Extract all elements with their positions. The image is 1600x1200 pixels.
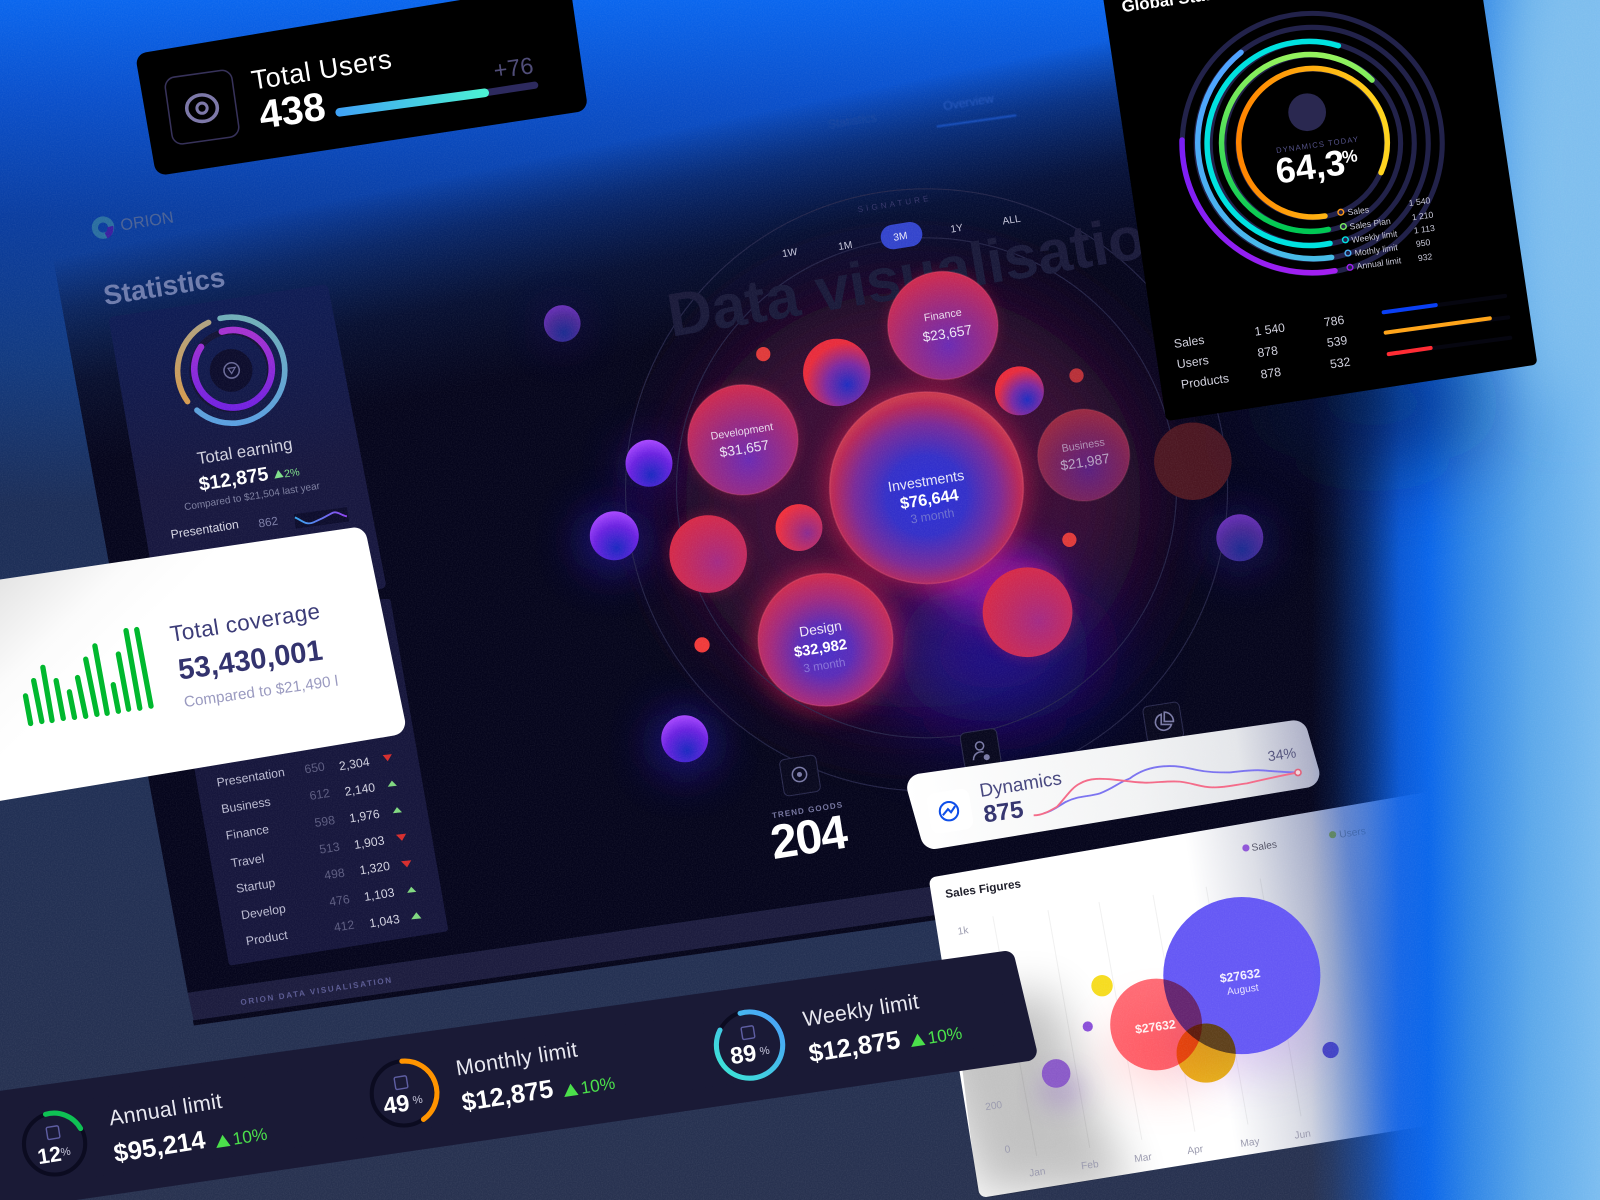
footer label: ORION DATA VISUALISATION: [240, 975, 393, 1007]
period selector: SIGNATURE: [857, 194, 932, 214]
axis labels: 0: [1004, 1144, 1011, 1156]
table rows: Travel: [230, 851, 265, 870]
gauge: 12%: 12: [36, 1142, 63, 1169]
ring legend: Mothly limit: [1354, 242, 1399, 258]
bubble: red lower right: [983, 567, 1072, 657]
period selector: [781, 194, 1022, 260]
gauge: 49%: %: [412, 1094, 424, 1107]
table rows: 498: [323, 866, 346, 883]
bubble: design: 3 month: [803, 656, 846, 675]
icon: eye: [164, 69, 240, 145]
chart legend: Users: [1339, 826, 1367, 841]
bubble: red left: [669, 515, 747, 593]
icon: user star: [960, 728, 1002, 770]
icon: pie chart: [1142, 701, 1184, 743]
period selector: 1M: [838, 240, 853, 253]
bubble: investments: [830, 392, 1023, 584]
card: total users: [148, 0, 576, 163]
bubble: red centre small: [776, 504, 822, 551]
card: global statistics: [1104, 0, 1532, 415]
bubble: finance: Finance: [923, 307, 963, 324]
dynamics today: DYNAMICS TODAY: [1276, 134, 1360, 155]
ring tracks: [1182, 13, 1442, 273]
weekly limit: [716, 989, 963, 1078]
bubble: design: Design: [798, 618, 843, 640]
panel: limits: [0, 961, 1027, 1190]
table rows: Product: [245, 928, 289, 948]
bubble chart: August: [1226, 983, 1260, 998]
gauge: 12%: [24, 1113, 85, 1174]
period selector: 1W: [781, 247, 799, 260]
table rows: Presentation: [216, 765, 286, 790]
table rows: 412: [333, 918, 356, 935]
card: total users: Total Users: [249, 44, 394, 96]
ring centre dot: [1288, 93, 1326, 131]
stats table: 1 540: [1254, 321, 1286, 339]
total earning: [183, 434, 321, 513]
stats table: 539: [1326, 333, 1348, 350]
trend goods: 204: [767, 806, 851, 870]
sales title: Sales Figures: [945, 877, 1022, 901]
bubble: finance: $23,657: [922, 322, 973, 345]
weekly limit: Weekly limit: [801, 989, 921, 1031]
dynamics today: 64,3: [1273, 142, 1347, 192]
table rows: Finance: [225, 822, 270, 843]
bubble: business: $21,987: [1059, 451, 1111, 473]
bubble: red blue upper left: [803, 339, 870, 406]
monthly limit: Monthly limit: [454, 1038, 579, 1080]
annual limit: 10%: [231, 1124, 269, 1149]
stats table: 786: [1323, 313, 1345, 330]
dark haze under global panel: [1265, 342, 1480, 464]
axis labels: Jun: [1294, 1129, 1312, 1142]
table rows: 2,140: [344, 780, 376, 799]
dynamics today: %: [1341, 145, 1359, 167]
logo: [95, 208, 175, 236]
axis labels: Apr: [1187, 1144, 1204, 1157]
table rows: Develop: [240, 901, 287, 922]
table rows: 2,304: [338, 755, 371, 773]
bubble glow: [546, 268, 1268, 773]
period selector: 1Y: [950, 223, 964, 236]
annual limit: $95,214: [112, 1126, 208, 1168]
header tabs: Statistics: [827, 110, 877, 132]
presentation row: Presentation: [170, 517, 240, 542]
presentation row: [170, 507, 349, 542]
line chart: [1034, 766, 1301, 815]
total earning: Total earning: [196, 434, 294, 468]
card: total coverage: [0, 541, 392, 791]
table rows: 1,976: [348, 807, 381, 825]
stats table: 878: [1257, 343, 1279, 360]
table rows: 612: [308, 786, 331, 803]
bubble: investments: 3 month: [910, 506, 956, 526]
orbit rings: [626, 189, 1228, 791]
bubble chart: $27632: [1219, 966, 1261, 986]
table rows: 513: [318, 840, 341, 857]
card: total coverage: 53,430,001: [176, 635, 325, 687]
bubble: development: [688, 385, 798, 495]
table rows: Startup: [235, 876, 276, 896]
period selector: ALL: [1002, 214, 1022, 227]
stats table: Products: [1180, 371, 1230, 392]
bubble: finance: [888, 271, 998, 380]
ring legend: Sales: [1347, 204, 1370, 217]
card: total coverage: Compared to $21,490 l: [183, 673, 339, 711]
dashboard footer bar: [188, 824, 1372, 1021]
purple spheres: [544, 305, 1263, 762]
axis labels: Jan: [1028, 1166, 1046, 1180]
ring legend: 1 113: [1413, 223, 1436, 236]
stats table: Sales: [1173, 333, 1205, 351]
stats table: 878: [1260, 365, 1282, 382]
total earning: Compared to $21,504 last year: [183, 481, 321, 513]
card: total coverage: Total coverage: [168, 598, 322, 647]
gauge: 89%: [716, 1011, 783, 1078]
bubble: business: Business: [1061, 436, 1106, 455]
donut chart: [178, 317, 285, 423]
axis labels: Feb: [1081, 1159, 1100, 1172]
table rows: 1,903: [353, 833, 386, 852]
trend goods: [767, 754, 851, 870]
bubble: investments: Investments: [887, 468, 965, 496]
gauge: 89%: 89: [728, 1039, 758, 1069]
heading: statistics: Statistics: [101, 261, 227, 311]
logo: ORION: [119, 208, 175, 235]
table rows: 598: [314, 813, 336, 830]
annual limit: Annual limit: [107, 1089, 224, 1130]
card: dynamics: 875: [982, 796, 1025, 828]
card: dynamics: Dynamics: [978, 767, 1063, 801]
panel: statistics card: [114, 290, 445, 962]
ring arcs: [1182, 41, 1387, 273]
right blue glow: [1311, 0, 1600, 1200]
bubble: red blue upper right: [995, 366, 1044, 415]
monthly limit: 10%: [579, 1073, 617, 1098]
axis labels: [957, 925, 1312, 1180]
ring legend: 950: [1415, 237, 1431, 249]
bubble chart: $27632: [1134, 1017, 1177, 1037]
ring legend: Weekly limit: [1351, 228, 1398, 245]
bubble: dim red: [1154, 422, 1232, 500]
gauge: 12%: %: [60, 1146, 72, 1159]
table rows: Business: [220, 795, 272, 816]
bubble: design: [758, 573, 893, 706]
trend goods: TREND GOODS: [771, 800, 844, 820]
card: total users: +76: [492, 52, 535, 84]
stats table: Users: [1176, 353, 1210, 371]
chart legend: Sales: [1251, 840, 1278, 854]
presentation row: 862: [258, 515, 279, 531]
card: sales figures: [918, 799, 1429, 1194]
icon: trend goods: [779, 754, 821, 797]
grid lines: [993, 879, 1301, 1156]
stats table: [1173, 313, 1351, 392]
header tabs: Overview: [942, 91, 995, 113]
ring legend: Annual limit: [1356, 255, 1402, 271]
table rows: 476: [328, 892, 351, 909]
table rows: 650: [303, 759, 326, 776]
table rows: 1,043: [368, 912, 401, 931]
ring legend: [1338, 195, 1436, 271]
table rows: [216, 754, 421, 948]
gauge: 49%: 49: [381, 1089, 411, 1119]
bubble: development: $31,657: [719, 438, 770, 460]
bubble: design: $32,982: [793, 637, 848, 661]
ring legend: Sales Plan: [1349, 216, 1391, 232]
small red dots: [694, 347, 1084, 653]
axis labels: 200: [985, 1100, 1003, 1113]
top right light haze: [1510, 0, 1600, 408]
table rows: 1,320: [358, 859, 391, 877]
table rows: 1,103: [363, 885, 396, 904]
ring legend: 1 540: [1408, 195, 1431, 208]
stats table: 532: [1329, 355, 1351, 371]
period selector: 3M: [893, 231, 908, 244]
grey shadow: [918, 990, 1133, 1194]
stats bars: [1384, 296, 1510, 354]
header tabs: [827, 91, 1016, 132]
bubble: business: [1038, 409, 1130, 501]
weekly limit: $12,875: [807, 1026, 902, 1068]
card: dynamics: 34%: [1267, 745, 1298, 765]
axis labels: 1k: [957, 925, 970, 938]
ring legend: 932: [1417, 251, 1433, 263]
card: dynamics: [921, 735, 1305, 835]
bubble: development: Development: [710, 421, 774, 443]
watermark title: Data visualisation: [662, 197, 1187, 350]
icon: trend badge: [926, 788, 974, 835]
weekly limit: 10%: [926, 1023, 963, 1048]
bubble chart: [1039, 897, 1339, 1108]
axis labels: May: [1240, 1136, 1261, 1150]
chart legend: [1242, 826, 1367, 854]
gauge: 49%: [372, 1061, 437, 1126]
annual limit: [24, 1089, 269, 1174]
card: total users: 438: [256, 85, 328, 137]
axis labels: Mar: [1134, 1152, 1153, 1165]
total earning: $12,875: [197, 463, 270, 496]
total earning: 2%: [283, 466, 301, 481]
bubble: investments: $76,644: [899, 486, 960, 513]
bar chart: coverage: [26, 630, 151, 723]
ring legend: 1 210: [1411, 209, 1434, 222]
monthly limit: $12,875: [460, 1075, 555, 1117]
gauge: 89%: %: [759, 1045, 771, 1058]
monthly limit: [372, 1038, 617, 1126]
